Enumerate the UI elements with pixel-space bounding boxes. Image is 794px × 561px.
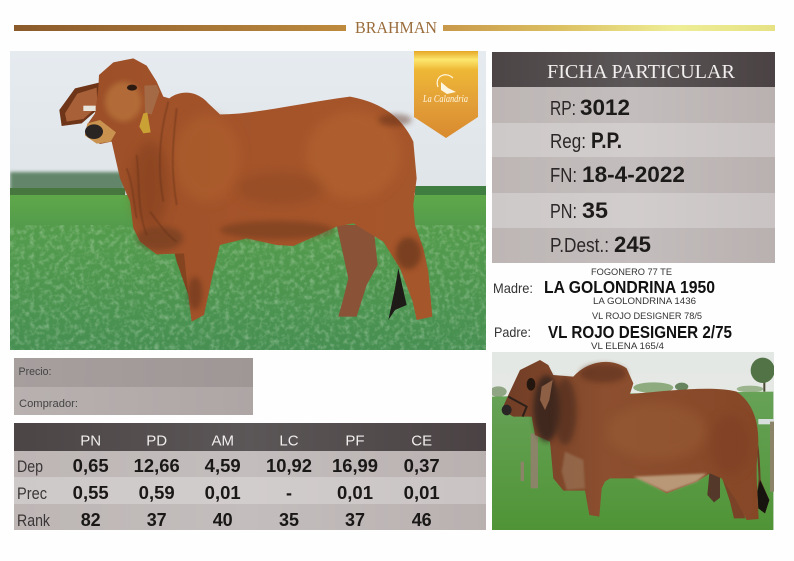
row: Rank: 35 bbox=[279, 510, 299, 530]
field: PN bbox=[550, 198, 608, 223]
field: Reg: Reg: bbox=[550, 131, 586, 153]
cow right ear bbox=[144, 85, 159, 114]
cow eye bbox=[127, 85, 137, 91]
row: Prec: 0,01 bbox=[205, 483, 241, 503]
photo: young red Brahman cow in green field bbox=[10, 51, 486, 350]
row: Dep: 4,59 bbox=[205, 456, 241, 476]
row: Prec: - bbox=[286, 483, 292, 503]
row: Rank: 37 bbox=[147, 510, 167, 530]
panel: precio y comprador bbox=[14, 358, 253, 415]
pedigree block: Padre: bbox=[494, 324, 531, 340]
bull body bbox=[502, 360, 759, 520]
table header: PF bbox=[345, 432, 365, 450]
icon: bird emblem bbox=[437, 75, 456, 94]
brand name: La Calandria bbox=[422, 94, 468, 105]
row: Dep: 0,37 bbox=[404, 456, 440, 476]
table header: CE bbox=[411, 432, 432, 450]
row: Rank: 82 bbox=[81, 510, 101, 530]
white ear tag bbox=[83, 106, 96, 111]
row: Dep: 10,92 bbox=[266, 456, 312, 476]
row: Prec: 0,55 bbox=[73, 483, 109, 503]
field: RP bbox=[550, 95, 630, 120]
yellow tag bbox=[139, 113, 151, 133]
fence posts bbox=[521, 422, 775, 492]
pedigree block: FOGONERO 77 TE bbox=[591, 267, 672, 278]
field: P.Dest: 245 bbox=[614, 232, 651, 257]
field: RP: 3012 bbox=[580, 95, 630, 120]
pedigree block: VL ELENA 165/4 bbox=[591, 341, 664, 352]
cow muzzle bbox=[85, 120, 116, 144]
table header: PD bbox=[146, 432, 167, 450]
pedigree block: VL ROJO DESIGNER 78/5 bbox=[592, 311, 702, 322]
label: Comprador: Comprador: bbox=[19, 398, 78, 410]
row: Dep bbox=[17, 456, 440, 476]
photo: sire, VL Rojo Designer bull bbox=[490, 352, 775, 532]
row: Rank: 37 bbox=[345, 510, 365, 530]
sheath bbox=[707, 473, 720, 502]
table header: PN bbox=[80, 432, 101, 450]
pedigree block bbox=[493, 267, 732, 352]
title: BRAHMAN: BRAHMAN bbox=[355, 18, 437, 37]
skin folds on neck and dewlap bbox=[127, 102, 177, 242]
bull shading bbox=[526, 360, 706, 494]
cow figure bbox=[59, 58, 432, 322]
tail bbox=[758, 444, 770, 514]
row: Prec: 0,59 bbox=[139, 483, 175, 503]
far hind leg bbox=[337, 225, 378, 317]
row: Prec bbox=[17, 483, 440, 503]
pedigree block: LA GOLONDRINA 1436 bbox=[593, 296, 696, 307]
row: Rank: 40 bbox=[213, 510, 233, 530]
pedigree block: Madre: bbox=[493, 280, 533, 296]
field: FN: 18-4-2022 bbox=[582, 162, 685, 187]
row: Prec: 0,01 bbox=[337, 483, 373, 503]
label: Precio: Precio: bbox=[18, 366, 52, 378]
header: breed title with gold rules bbox=[14, 18, 775, 37]
body shading bbox=[105, 82, 421, 310]
logo ribbon: La Calandria bbox=[414, 51, 478, 138]
row: Prec: Prec bbox=[17, 484, 47, 503]
field: P.Dest bbox=[550, 232, 651, 257]
pasture bbox=[492, 392, 773, 532]
background trees bbox=[490, 358, 775, 397]
row: Dep: 16,99 bbox=[332, 456, 378, 476]
pedigree block: LA GOLONDRINA 1950 bbox=[544, 277, 715, 297]
field: RP: RP: bbox=[550, 98, 576, 120]
field: Reg bbox=[550, 128, 622, 153]
field: Reg: P.P. bbox=[591, 128, 622, 153]
table header: AM bbox=[211, 432, 234, 450]
far hind leg bbox=[722, 480, 745, 518]
heading: FICHA PARTICULAR bbox=[547, 61, 736, 83]
far front leg bbox=[174, 253, 191, 314]
field: FN: FN: bbox=[550, 165, 577, 187]
ear bbox=[59, 83, 99, 126]
field: PN: 35 bbox=[582, 198, 608, 223]
table: genetic data bbox=[14, 423, 486, 530]
table header: LC bbox=[279, 432, 299, 450]
row: Dep: 0,65 bbox=[73, 456, 109, 476]
panel: ficha particular bbox=[492, 52, 775, 263]
row: Rank: Rank bbox=[17, 511, 50, 530]
muzzle and halter bbox=[502, 397, 527, 417]
row: Rank bbox=[17, 510, 432, 530]
row: Dep: 12,66 bbox=[134, 456, 180, 476]
tail bbox=[388, 268, 407, 320]
body bbox=[85, 58, 432, 322]
row: Rank: 46 bbox=[412, 510, 432, 530]
field: PN: PN: bbox=[550, 201, 577, 223]
row: Prec: 0,01 bbox=[404, 483, 440, 503]
table header bbox=[80, 432, 432, 450]
field: P.Dest: P.Dest.: bbox=[550, 235, 609, 257]
row: Dep: Dep bbox=[17, 457, 43, 476]
pedigree block: VL ROJO DESIGNER 2/75 bbox=[548, 322, 732, 342]
